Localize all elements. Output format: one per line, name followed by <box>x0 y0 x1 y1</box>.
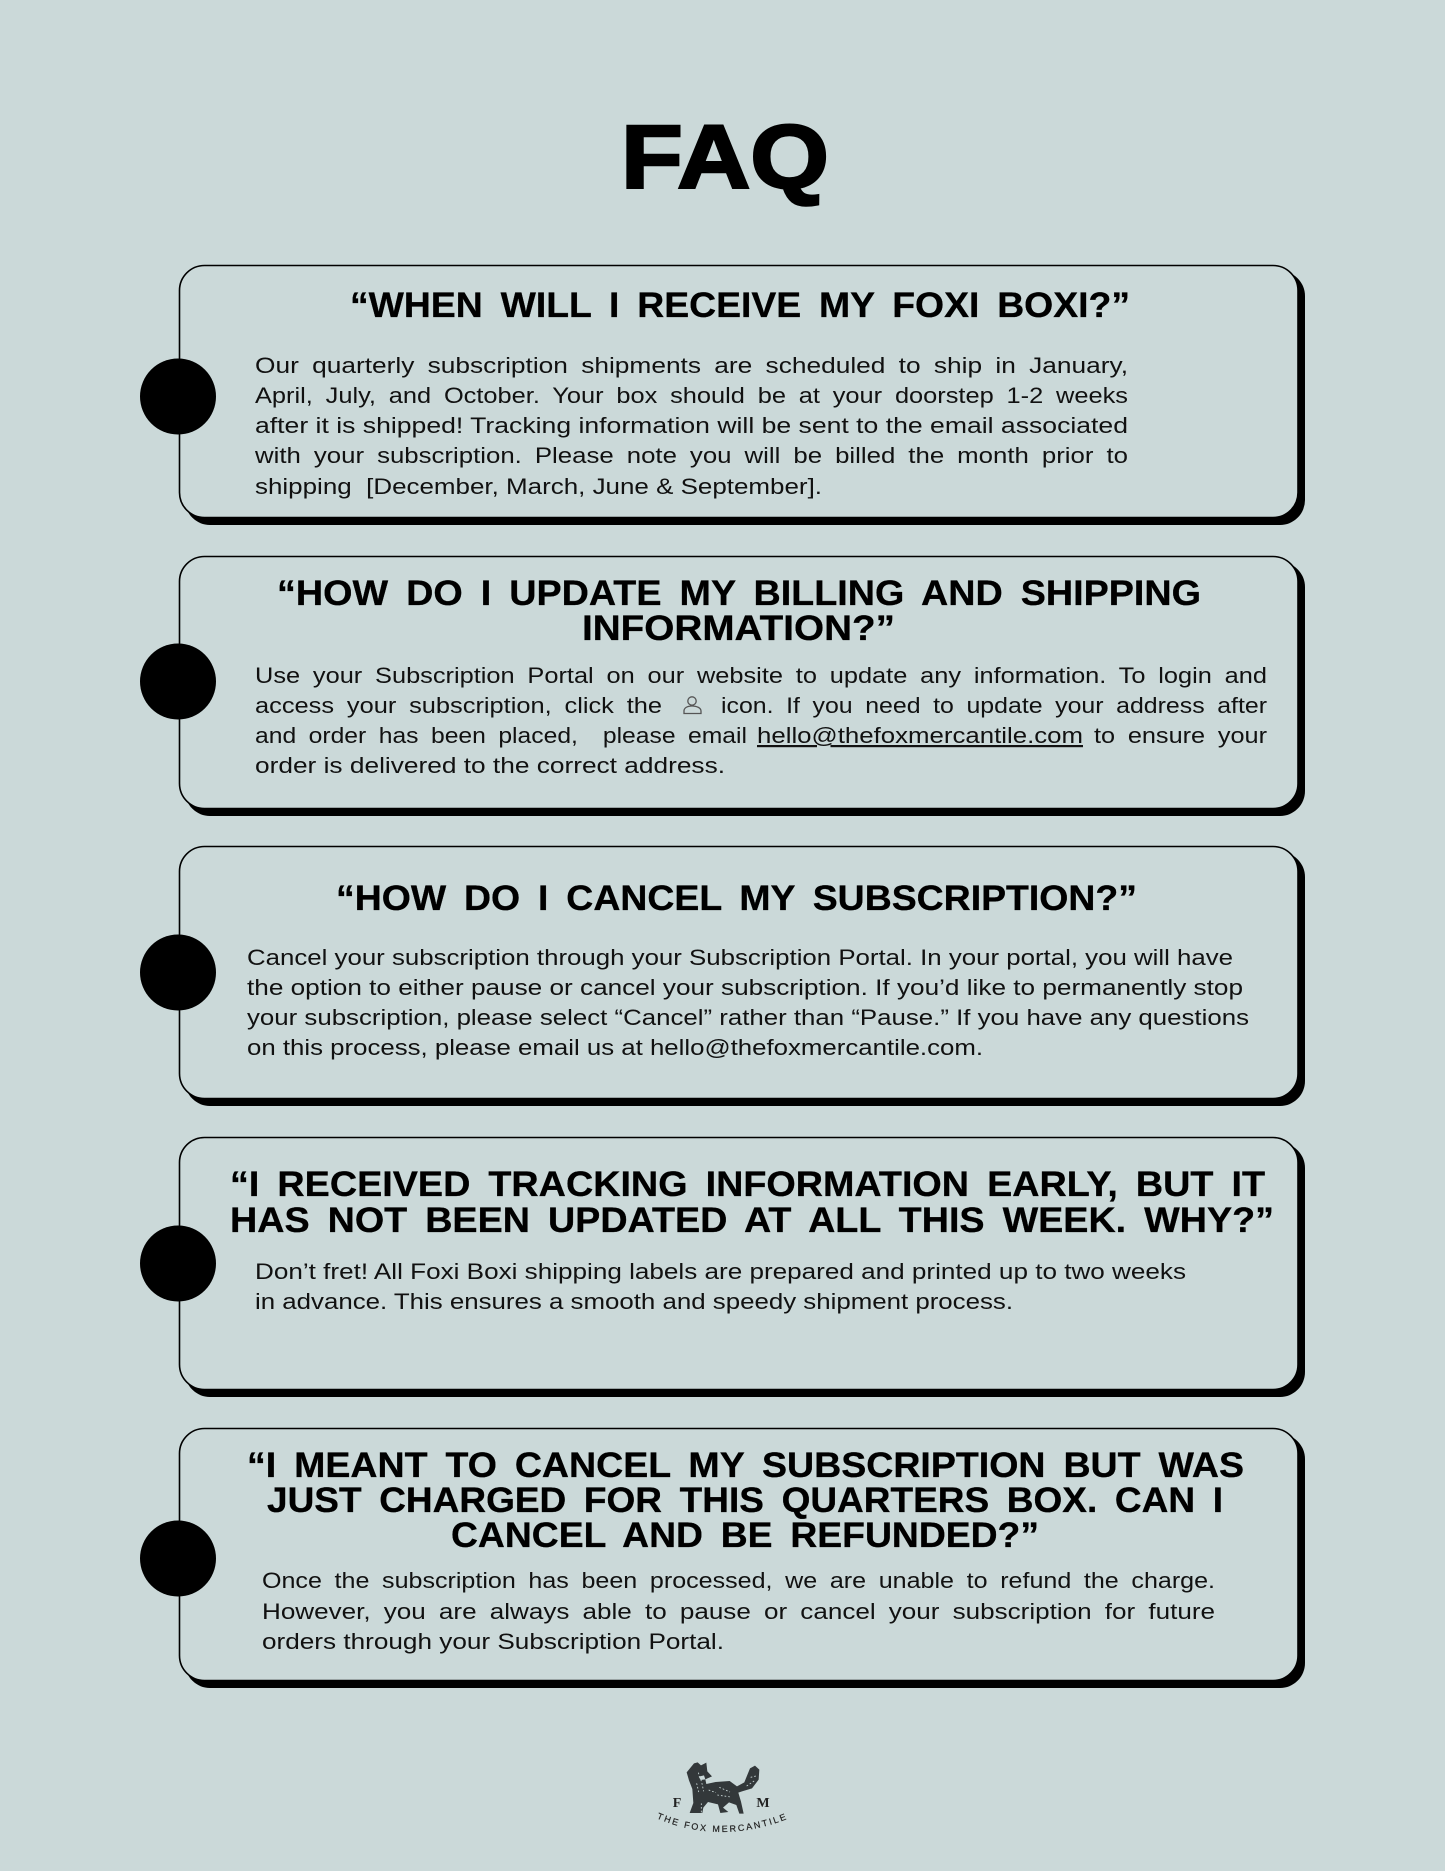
icon: account person <box>684 697 701 714</box>
question heading <box>277 574 1201 648</box>
answer text: Once the subscription has been processed, we are unable to refund the charge. <box>262 1568 1215 1593</box>
answer text <box>262 1568 1215 1654</box>
answer text: to ensure your <box>1094 723 1267 748</box>
answer text: icon. If you need to update your address after <box>721 693 1267 718</box>
answer text: Don’t fret! All Foxi Boxi shipping labels are prepared and printed up to two weeks <box>255 1259 1186 1284</box>
question heading: HAS NOT BEEN UPDATED AT ALL THIS WEEK. WHY?” <box>230 1201 1274 1240</box>
question heading: INFORMATION?” <box>582 609 895 648</box>
logo: The Fox Mercantile: THE FOX MERCANTILE <box>658 1812 786 1832</box>
marker dot <box>140 644 216 720</box>
answer text <box>255 1259 1186 1314</box>
question heading: “WHEN WILL I RECEIVE MY FOXI BOXI?” <box>350 286 1130 325</box>
title: FAQ <box>621 108 829 208</box>
panel: how do I update billing and shipping <box>140 556 1305 816</box>
question heading <box>247 1446 1244 1555</box>
icon: fox <box>687 1762 759 1814</box>
answer text: on this process, please email us at hello@thefoxmercantile.com. <box>247 1035 983 1060</box>
brand name <box>658 1819 787 1832</box>
answer text: the option to either pause or cancel your subscription. If you’d like to permanently stop <box>247 975 1243 1000</box>
panel: when will I receive my Foxi Boxi <box>140 266 1305 525</box>
answer text: in advance. This ensures a smooth and speedy shipment process. <box>255 1289 1013 1314</box>
answer text: orders through your Subscription Portal. <box>262 1629 724 1654</box>
question heading: CANCEL AND BE REFUNDED?” <box>451 1516 1039 1555</box>
marker dot <box>140 1520 216 1596</box>
monogram letters: F <box>673 1796 681 1811</box>
question heading: “I RECEIVED TRACKING INFORMATION EARLY, BUT IT <box>230 1165 1265 1204</box>
panel: how do I cancel my subscription <box>140 846 1305 1106</box>
monogram letters: M <box>756 1796 770 1811</box>
marker dot <box>140 1226 216 1302</box>
answer text <box>247 945 1249 1060</box>
question heading <box>230 1165 1274 1240</box>
answer text: hello@thefoxmercantile.com <box>757 723 1083 748</box>
panel: charged and refund <box>140 1428 1305 1688</box>
answer text <box>254 353 1128 499</box>
answer text: April, July, and October. Your box should be at your doorstep 1-2 weeks <box>255 383 1128 408</box>
answer text: Cancel your subscription through your Subscription Portal. In your portal, you will have <box>247 945 1233 970</box>
panel: tracking information not updated <box>140 1138 1305 1397</box>
question heading: “HOW DO I CANCEL MY SUBSCRIPTION?” <box>336 879 1137 918</box>
answer text: However, you are always able to pause or cancel your subscription for future <box>262 1599 1215 1624</box>
marker dot <box>140 934 216 1010</box>
question heading: “HOW DO I UPDATE MY BILLING AND SHIPPING <box>277 574 1201 613</box>
answer text <box>255 663 1267 778</box>
answer text: shipping [December, March, June & September]. <box>255 474 822 499</box>
answer text: Use your Subscription Portal on our website to update any information. To login and <box>255 663 1267 688</box>
marker dot <box>140 358 216 434</box>
answer text: Our quarterly subscription shipments are scheduled to ship in January, <box>255 353 1128 378</box>
answer text: order is delivered to the correct address. <box>255 753 725 778</box>
answer text: and order has been placed, please email <box>255 723 747 748</box>
answer text: with your subscription. Please note you will be billed the month prior to <box>254 443 1128 468</box>
monogram letters <box>673 1796 770 1811</box>
question heading: “I MEANT TO CANCEL MY SUBSCRIPTION BUT WAS <box>247 1446 1244 1485</box>
answer text: access your subscription, click the <box>255 693 662 718</box>
logo: The Fox Mercantile <box>658 1762 786 1832</box>
question heading: JUST CHARGED FOR THIS QUARTERS BOX. CAN I <box>267 1481 1223 1520</box>
answer text: your subscription, please select “Cancel” rather than “Pause.” If you have any questions <box>247 1005 1249 1030</box>
answer text: after it is shipped! Tracking information will be sent to the email associated <box>255 413 1128 438</box>
